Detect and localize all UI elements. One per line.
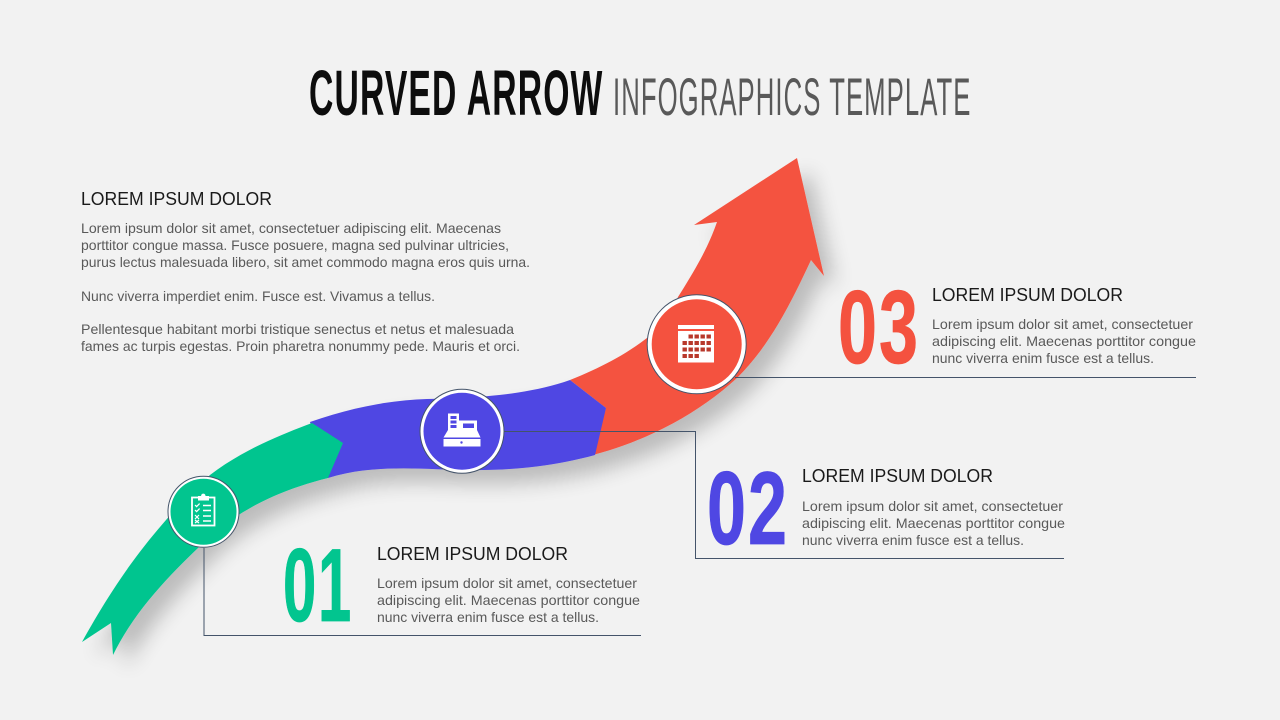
arrow segment: red head <box>570 158 824 455</box>
arrow segment: blue middle <box>310 380 606 478</box>
step 1 text: LOREM IPSUM DOLOR <box>377 543 568 564</box>
text block: intro: porttitor congue massa. Fusce posuere, magna sed pulvinar ultricies, <box>81 238 509 253</box>
text block: intro: Pellentesque habitant morbi tristique senectus et netus et malesuada <box>81 322 514 337</box>
text block: intro: Nunc viverra imperdiet enim. Fusce est. Vivamus a tellus. <box>81 289 435 304</box>
step 2 content <box>707 451 1065 567</box>
text block: intro: fames ac turpis egestas. Proin pharetra nonummy pede. Mauris et orci. <box>81 339 520 354</box>
icon: cash register <box>444 414 480 446</box>
step 1 badge <box>168 476 239 547</box>
text block: intro: purus lectus malesuada libero, sit amet commodo magna eros quis urna. <box>81 255 530 270</box>
step 3 text: Lorem ipsum dolor sit amet, consectetuer <box>932 317 1193 332</box>
number 01: 01 <box>283 528 353 644</box>
step 1 text: adipiscing elit. Maecenas porttitor congue <box>377 593 640 608</box>
step 1 text: nunc viverra enim fusce est a tellus. <box>377 610 599 625</box>
icon: calendar <box>678 325 714 362</box>
title: CURVED ARROW <box>309 57 604 129</box>
step 1 text: Lorem ipsum dolor sit amet, consectetuer <box>377 576 637 591</box>
step 2 text: nunc viverra enim fusce est a tellus. <box>802 533 1024 548</box>
text block: intro <box>81 188 530 354</box>
connector line 1 <box>204 548 641 636</box>
text block: intro: LOREM IPSUM DOLOR <box>81 188 272 209</box>
step 2 text <box>802 465 1065 548</box>
number 03: 03 <box>838 270 920 386</box>
step 3 text: LOREM IPSUM DOLOR <box>932 284 1123 305</box>
step 2 text: Lorem ipsum dolor sit amet, consectetuer <box>802 499 1063 514</box>
step 3 text <box>932 284 1196 366</box>
step 1 content <box>283 528 640 644</box>
curved arrow <box>82 158 824 655</box>
step 1 text <box>377 543 640 625</box>
connector line 2 <box>503 432 1064 558</box>
step 3 text: nunc viverra enim fusce est a tellus. <box>932 351 1154 366</box>
step 3 content <box>838 270 1196 386</box>
icon: clipboard checklist <box>192 494 214 526</box>
number 02: 02 <box>707 451 789 567</box>
step 3 text: adipiscing elit. Maecenas porttitor congue <box>932 334 1196 349</box>
arrow segment: green tail <box>82 423 343 655</box>
step 2 text: adipiscing elit. Maecenas porttitor congue <box>802 516 1065 531</box>
step 2 badge <box>420 389 504 473</box>
step 2 text: LOREM IPSUM DOLOR <box>802 465 993 486</box>
step 3 badge <box>647 295 746 394</box>
text block: intro: Lorem ipsum dolor sit amet, consectetuer adipiscing elit. Maecenas <box>81 221 501 236</box>
connector line 3 <box>735 376 1196 378</box>
